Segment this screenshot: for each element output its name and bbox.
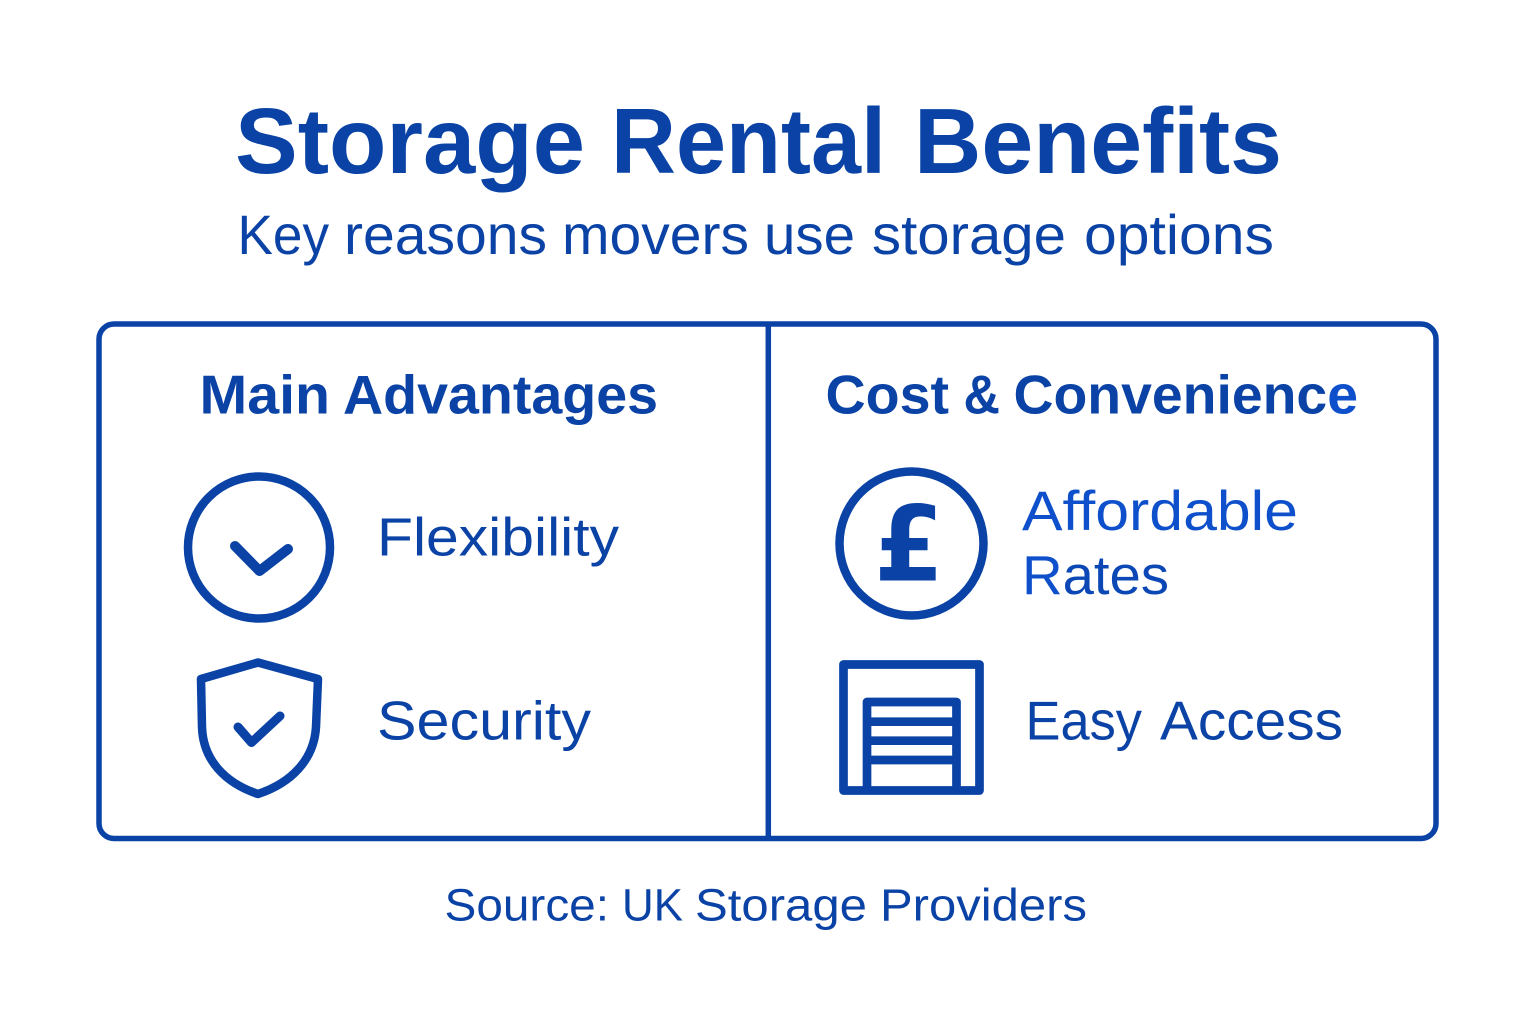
source note: Source: [444, 880, 609, 930]
subtitle: options [1084, 203, 1274, 266]
title [235, 89, 1282, 193]
heading: main advantages: Advantages [343, 364, 658, 426]
heading: cost and convenience: Convenience [1014, 364, 1358, 426]
subtitle: movers [562, 203, 749, 266]
icon: garage door [844, 664, 980, 790]
panel: cost and convenience [826, 364, 1358, 790]
source note [444, 880, 1087, 930]
label: affordable rates: Affordable [1022, 479, 1298, 542]
subtitle: storage [872, 203, 1066, 266]
label: easy access [1026, 690, 1343, 752]
label: affordable rates: Rates [1022, 544, 1169, 606]
source note: UK [622, 880, 683, 930]
label: affordable rates [1022, 479, 1298, 606]
panel divider [766, 324, 771, 838]
title: Storage [235, 89, 585, 193]
heading: cost and convenience: Cost [826, 364, 949, 426]
subtitle: reasons [344, 203, 547, 266]
icon: pound coin: £ [874, 484, 944, 606]
icon: security shield [201, 662, 318, 794]
subtitle [238, 203, 1274, 266]
heading: cost and convenience: & [964, 364, 1000, 426]
heading: cost and convenience [826, 364, 1358, 426]
source note: Providers [880, 880, 1087, 930]
label: flexibility: Flexibility [377, 508, 619, 568]
subtitle: Key [238, 203, 329, 266]
label: easy access: Easy [1026, 690, 1142, 752]
heading: main advantages [200, 364, 658, 426]
source note: Storage [695, 880, 867, 930]
panel frame [99, 324, 1436, 838]
panel: main advantages [188, 364, 658, 794]
icon: flexibility chevron circle [188, 476, 330, 618]
heading: main advantages: Main [200, 364, 330, 426]
label: security: Security [377, 690, 592, 752]
label: easy access: Access [1160, 690, 1343, 752]
subtitle: use [764, 203, 855, 266]
title: Benefits [914, 89, 1282, 193]
title: Rental [611, 89, 886, 193]
icon: pound coin [840, 472, 984, 616]
